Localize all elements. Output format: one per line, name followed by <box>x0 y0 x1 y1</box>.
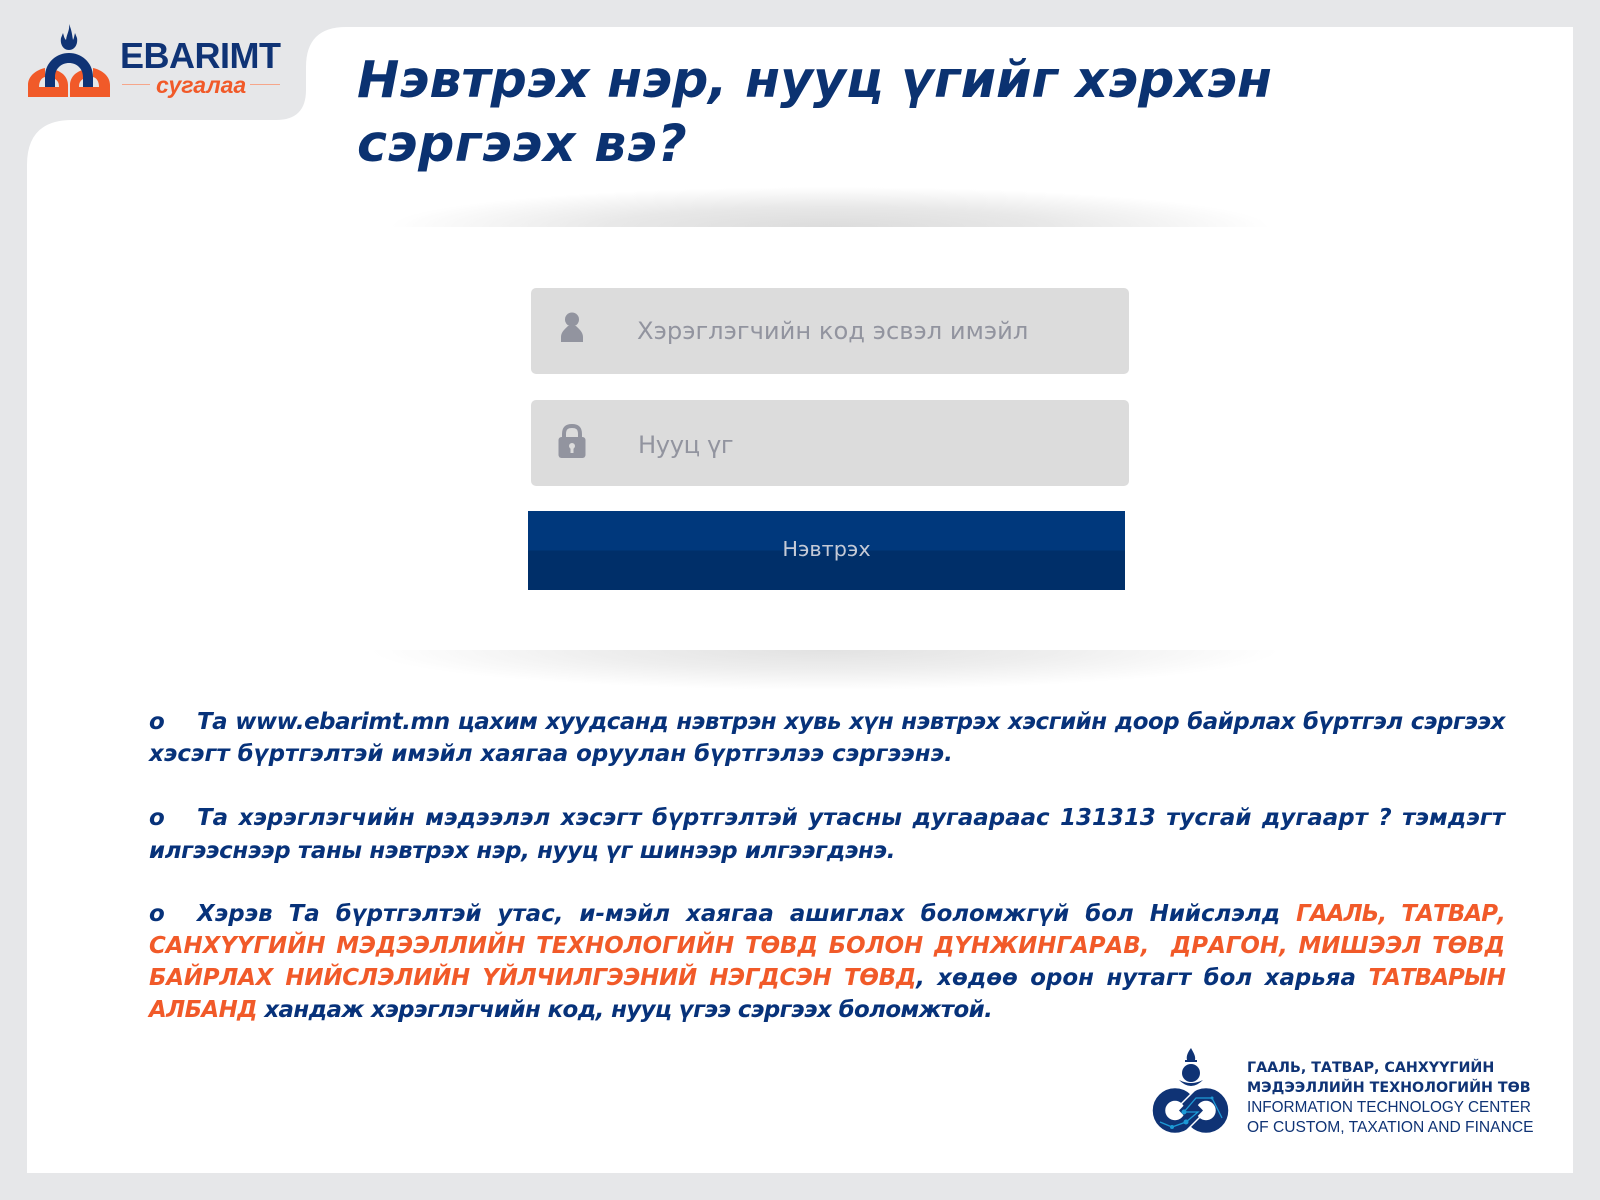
username placeholder: Хэрэглэгчийн код эсвэл имэйл <box>637 317 1028 345</box>
password placeholder: Нууц үг <box>638 431 733 459</box>
login form shadow top <box>390 187 1270 227</box>
icon: user <box>561 312 583 342</box>
paragraph 3: Хэрэв Та бүртгэлтэй утас, и-мэйл хаягаа ашиглах боломжгүй бол Нийслэлд ГААЛЬ, ТАТВАР, <box>197 901 1505 927</box>
title: сэргээх вэ? <box>357 114 687 173</box>
title <box>357 50 1272 173</box>
paragraph 3 <box>148 901 1506 1023</box>
paragraph 2 <box>149 805 1506 864</box>
paragraph 3: о <box>149 901 165 927</box>
paragraph 3: БАЙРЛАХ НИЙСЛЭЛИЙН ҮЙЛЧИЛГЭЭНИЙ НЭГДСЭН ТӨВД, хөдөө орон нутагт бол харьяа ТАТВАРЫН <box>149 965 1505 991</box>
paragraph 1: хэсэгт бүртгэлтэй имэйл хаягаа оруулан бүртгэлээ сэргээнэ. <box>149 741 953 767</box>
organisation name: МЭДЭЭЛЛИЙН ТЕХНОЛОГИЙН ТӨВ <box>1247 1080 1531 1096</box>
password field <box>531 400 1129 486</box>
brand name: EBARIMT <box>120 35 280 76</box>
paragraph 3: САНХҮҮГИЙН МЭДЭЭЛЛИЙН ТЕХНОЛОГИЙН ТӨВД БОЛОН ДҮНЖИНГАРАВ, ДРАГОН, МИШЭЭЛ ТӨВД <box>149 933 1505 959</box>
paragraph 2: илгээснээр таны нэвтрэх нэр, нууц үг шинээр илгээгдэнэ. <box>149 838 895 864</box>
icon: lock <box>558 424 586 458</box>
organisation name: INFORMATION TECHNOLOGY CENTER <box>1247 1099 1531 1116</box>
login button: Нэвтрэх <box>782 537 871 561</box>
paragraph 1 <box>148 709 1506 767</box>
login form shadow bottom <box>370 650 1280 690</box>
paragraph 3: АЛБАНД хандаж хэрэглэгчийн код, нууц үгээ сэргээх боломжтой. <box>149 997 992 1023</box>
paragraph 2: Та хэрэглэгчийн мэдээлэл хэсэгт бүртгэлтэй утасны дугаараас 131313 тусгай дугаарт ? тэмдэгт <box>197 805 1505 831</box>
organisation name: OF CUSTOM, TAXATION AND FINANCE <box>1247 1118 1534 1136</box>
title: Нэвтрэх нэр, нууц үгийг хэрхэн <box>357 50 1272 109</box>
organisation name <box>1247 1058 1534 1136</box>
organisation name: ГААЛЬ, ТАТВАР, САНХҮҮГИЙН <box>1247 1060 1494 1076</box>
paragraph 1: Та www.ebarimt.mn цахим хуудсанд нэвтрэн хувь хүн нэвтрэх хэсгийн доор байрлах бүртгэл сэргээх <box>197 709 1505 735</box>
username field <box>531 288 1129 374</box>
footer logo <box>1152 1048 1534 1136</box>
login button <box>528 511 1125 590</box>
icon: ebarimt emblem <box>28 24 110 97</box>
paragraph 2: о <box>149 805 165 831</box>
paragraph 1: о <box>149 709 165 735</box>
logo: EBARIMT сугалаа <box>28 24 281 98</box>
instructions text <box>148 709 1506 1023</box>
brand subtitle: сугалаа <box>156 72 246 98</box>
icon: emblem <box>1152 1048 1228 1133</box>
